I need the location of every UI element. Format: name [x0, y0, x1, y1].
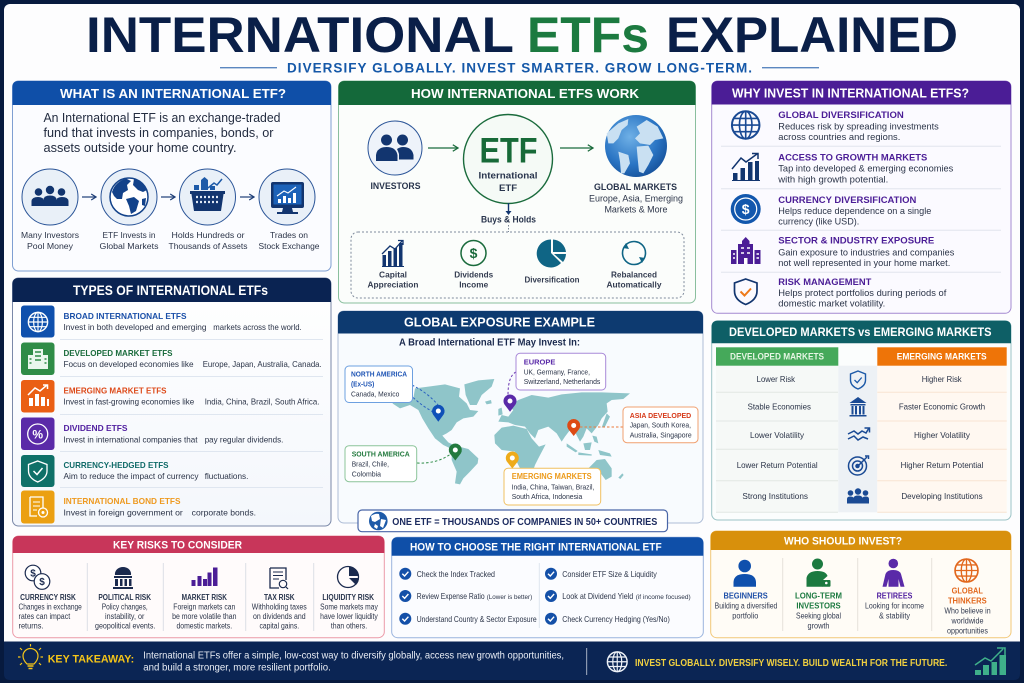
- risk: liquidity: LIQUIDITY RISK: [322, 593, 374, 602]
- arrow: buys and holds: Buys & Holds: [481, 214, 536, 224]
- icon: basket: [180, 169, 236, 225]
- type: currency hedged: Aim to reduce the impact of currency: [64, 471, 199, 481]
- checklist text: (Lower is better): [487, 594, 532, 601]
- step labels: Many Investors: [21, 230, 79, 240]
- title: EXPLAINED: [666, 7, 958, 63]
- outcomes dashed box: [351, 232, 684, 298]
- icon: growth chart: [975, 648, 1006, 675]
- type: broad: markets across the world.: [213, 322, 302, 332]
- risk: market: domestic markets.: [176, 622, 232, 631]
- benefit: growth markets: ACCESS TO GROWTH MARKETS: [778, 152, 927, 162]
- emerging list: Higher Volatility: [914, 430, 971, 440]
- benefit: growth markets: Tap into developed & emerging economies: [778, 164, 954, 174]
- icon: target: [848, 456, 868, 475]
- icon: investors: [368, 121, 422, 191]
- type: broad: [21, 306, 302, 338]
- step labels: Thousands of Assets: [168, 241, 248, 251]
- heading: how to choose: HOW TO CHOOSE THE RIGHT INTERNATIONAL ETF: [410, 542, 662, 554]
- benefit: growth markets: with high growth potential.: [777, 174, 888, 184]
- type: currency hedged: CURRENCY-HEDGED ETFS: [64, 460, 169, 470]
- benefit: sector: [731, 236, 955, 268]
- panel: how to choose: [392, 537, 703, 638]
- benefit: global diversification: across countries and regions.: [778, 132, 900, 142]
- audience: retirees: Looking for income: [865, 602, 924, 611]
- audience: long-term: LONG-TERM: [795, 592, 842, 601]
- checklist text: Check Currency Hedging (Yes/No): [562, 614, 670, 624]
- developed list: Lower Risk: [757, 374, 796, 384]
- audience: retirees: [865, 559, 924, 620]
- step labels: Trades on: [270, 230, 308, 240]
- type: dividend: %: [32, 428, 43, 442]
- callout: asia developed: [623, 407, 698, 443]
- world map: [392, 379, 630, 484]
- risk: market: be more volatile than: [172, 612, 236, 621]
- ETF circle: International: [478, 170, 538, 182]
- benefit: sector: not well represented in your home market.: [778, 258, 950, 268]
- benefit: currency: $: [742, 201, 750, 217]
- risk: currency: $: [30, 568, 36, 580]
- benefit: risk management: [734, 277, 947, 309]
- benefit: global diversification: GLOBAL DIVERSIFICATION: [778, 110, 904, 120]
- audience: global thinkers: THINKERS: [948, 597, 987, 606]
- callout: asia developed: Japan, South Korea,: [630, 421, 691, 430]
- developed list: Stable Economies: [748, 401, 811, 411]
- step labels: Pool Money: [27, 241, 74, 251]
- callout: north america: (Ex-US): [351, 380, 375, 389]
- risk: market: [172, 568, 236, 631]
- risk: currency: $: [39, 577, 45, 588]
- callout: north america: Canada, Mexico: [351, 389, 399, 398]
- risk: market: MARKET RISK: [182, 593, 227, 602]
- arrow: [560, 147, 593, 149]
- benefit: global diversification: [732, 110, 939, 142]
- step labels: Stock Exchange: [258, 241, 320, 251]
- audience: long-term: INVESTORS: [796, 602, 841, 611]
- emerging list: [899, 374, 985, 501]
- risk: liquidity: [320, 566, 378, 631]
- callout: europe: UK, Germany, France,: [524, 367, 590, 376]
- panel: why invest: [712, 81, 1011, 313]
- checklist text: [417, 569, 691, 624]
- global markets label: Markets & More: [604, 204, 668, 214]
- type: dividend: [21, 418, 283, 450]
- step labels: Holds Hundreds or: [172, 230, 245, 240]
- audience: long-term: [795, 558, 842, 631]
- callout: emerging markets: South Africa, Indonesia: [512, 492, 583, 501]
- risk: currency: rates can impact: [18, 612, 71, 621]
- definition text: An International ETF is an exchange-traded: [44, 110, 280, 125]
- column heading: developed: DEVELOPED MARKETS: [730, 352, 824, 362]
- heading: global exposure: GLOBAL EXPOSURE EXAMPLE: [404, 314, 595, 330]
- arrow: [240, 196, 254, 198]
- type: emerging: Invest in fast-growing economies like: [64, 397, 194, 407]
- definition text: assets outside your home country.: [44, 140, 236, 155]
- callout: north america: NORTH AMERICA: [351, 370, 408, 379]
- outcome: dividends income: $: [470, 245, 478, 261]
- checklist text: Look at Dividend Yield: [562, 591, 634, 601]
- banner: one ETF: [358, 510, 668, 532]
- type: developed: Focus on developed economies like: [64, 359, 194, 369]
- benefit: currency: Helps reduce dependence on a single: [778, 206, 931, 216]
- map subtitle: A Broad International ETF May Invest In:: [399, 338, 580, 349]
- outcome: capital appreciation: Appreciation: [368, 280, 418, 290]
- heading: key risks: KEY RISKS TO CONSIDER: [113, 540, 242, 552]
- benefit: sector: Gain exposure to industries and companies: [778, 247, 955, 257]
- heading: who: WHO SHOULD INVEST?: [784, 536, 902, 548]
- ETF circle: ETF: [480, 132, 538, 170]
- type: dividend: Invest in international companies that: [64, 435, 198, 445]
- audience: long-term: Seeking global: [796, 612, 841, 621]
- type: developed: [21, 342, 322, 375]
- risk: currency: CURRENCY RISK: [20, 593, 76, 602]
- type: dividend: pay regular dividends.: [205, 435, 283, 445]
- risk: political: [95, 564, 155, 631]
- panel: types of international ETFs: [12, 278, 331, 526]
- checklist text: Consider ETF Size & Liquidity: [562, 569, 658, 579]
- heading: developed vs emerging: DEVELOPED MARKETS vs EMERGING MARKETS: [729, 325, 992, 339]
- check marks: [399, 568, 557, 625]
- checklist text: Check the Index Tracked: [417, 569, 495, 579]
- developed list: Lower Return Potential: [737, 460, 818, 470]
- risk: political: instability, or: [105, 612, 145, 621]
- risk: tax: capital gains.: [259, 622, 299, 631]
- risk: political: POLITICAL RISK: [98, 593, 151, 602]
- icon: bank: [850, 397, 866, 416]
- risk: market: Foreign markets can: [173, 602, 235, 611]
- icon: monitor: [259, 169, 315, 225]
- footer: key takeaway band: [4, 642, 1020, 680]
- outcome: dividends income: [454, 240, 493, 290]
- panel: key risks: [13, 536, 384, 638]
- arrow: [428, 147, 458, 149]
- definition text: fund that invests in companies, bonds, or: [44, 125, 274, 140]
- benefit: risk management: domestic market volatility.: [778, 299, 885, 309]
- audience: beginners: BEGINNERS: [723, 592, 768, 601]
- risk: political: Policy changes,: [102, 602, 148, 611]
- global markets label: [589, 182, 683, 214]
- audience: beginners: portfolio: [732, 611, 759, 620]
- icon: blue globe: [605, 115, 667, 177]
- pin: north america: [432, 405, 445, 422]
- pin: emerging: [506, 452, 519, 468]
- emerging list: Faster Economic Growth: [899, 401, 985, 411]
- type: bond: INTERNATIONAL BOND ETFS: [64, 496, 181, 506]
- type: currency hedged: [21, 455, 248, 487]
- global markets label: GLOBAL MARKETS: [594, 182, 677, 192]
- callout: emerging markets: [504, 468, 601, 505]
- risk: political: geopolitical events.: [95, 622, 155, 631]
- icon: investors: INVESTORS: [370, 181, 421, 191]
- type: emerging: [21, 380, 319, 412]
- icon: investors pool: [22, 169, 78, 225]
- emerging list: Higher Return Potential: [901, 460, 983, 470]
- heading: types: TYPES OF INTERNATIONAL ETFs: [73, 283, 268, 298]
- risk: tax: on dividends and: [253, 612, 306, 621]
- callout: asia developed: Australia, Singapore: [630, 430, 692, 439]
- connectors: [407, 372, 623, 463]
- outcome: rebalanced: [606, 242, 662, 290]
- risk: liquidity: Some markets may: [320, 602, 378, 611]
- type: bond: Invest in foreign government or: [64, 508, 183, 518]
- type: developed: Europe, Japan, Australia, Canada.: [203, 359, 322, 369]
- icon: volatility: [848, 428, 870, 440]
- outcome: rebalanced: Automatically: [606, 280, 662, 290]
- step labels: Global Markets: [100, 241, 158, 251]
- type: emerging: India, China, Brazil, South Africa.: [205, 397, 319, 407]
- icon: shield: [850, 371, 866, 389]
- callout: emerging markets: EMERGING MARKETS: [512, 472, 592, 481]
- audience: global thinkers: [944, 559, 991, 635]
- audience: global thinkers: GLOBAL: [952, 587, 983, 596]
- outcome: dividends income: Dividends: [454, 270, 493, 280]
- callout: europe: [516, 353, 606, 390]
- arrow: buys and holds: [481, 203, 536, 232]
- risk: tax: [252, 568, 307, 631]
- takeaway text: and build a stronger, more resilient portfolio.: [143, 663, 331, 674]
- audience: retirees: & stability: [879, 611, 910, 620]
- callout: south america: Brazil, Chile,: [352, 460, 389, 469]
- icon: light bulb: [18, 644, 43, 668]
- icon: footer globe: [607, 652, 627, 672]
- global markets label: Europe, Asia, Emerging: [589, 194, 683, 204]
- developed list: Lower Volatility: [750, 430, 805, 440]
- title: ETFs: [527, 7, 649, 63]
- panel: what is an international ETF: [12, 81, 331, 271]
- benefit: risk management: RISK MANAGEMENT: [778, 277, 872, 287]
- definition text: [44, 110, 280, 155]
- outcome: capital appreciation: Capital: [379, 270, 407, 280]
- type: developed: DEVELOPED MARKET ETFS: [64, 348, 173, 358]
- panel: global exposure example: [338, 311, 703, 532]
- slogan: INVEST GLOBALLY. DIVERSIFY WISELY. BUILD WEALTH FOR THE FUTURE.: [635, 658, 948, 669]
- audience: retirees: RETIREES: [877, 592, 913, 601]
- checklist text: (if income focused): [636, 594, 691, 601]
- outcome: diversification: Diversification: [524, 274, 580, 284]
- audience: beginners: [715, 560, 777, 620]
- callout: south america: SOUTH AMERICA: [352, 449, 410, 458]
- outcome: diversification: [524, 239, 580, 284]
- benefit: currency: CURRENCY DIVERSIFICATION: [778, 195, 917, 205]
- type: broad: Invest in both developed and emerging: [64, 322, 207, 332]
- benefit: growth markets: [732, 152, 954, 184]
- risk: liquidity: than others.: [331, 622, 367, 631]
- step labels: ETF Invests in: [102, 230, 156, 240]
- risk: tax: TAX RISK: [264, 593, 295, 602]
- takeaway text: International ETFs offer a simple, low-cost way to diversify globally, access new growth opportunities,: [143, 650, 564, 661]
- benefit: risk management: Helps protect portfolios during periods of: [778, 288, 947, 298]
- type: bond: [21, 490, 256, 524]
- emerging list: Developing Institutions: [901, 491, 983, 501]
- pin: europe: [503, 395, 516, 412]
- type: emerging: EMERGING MARKET ETFS: [64, 386, 167, 396]
- pin: south america: [449, 444, 462, 460]
- outcome: capital appreciation: [368, 240, 418, 290]
- callout: asia developed: ASIA DEVELOPED: [630, 411, 692, 420]
- type: broad: BROAD INTERNATIONAL ETFS: [64, 311, 187, 321]
- audience: global thinkers: Who believe in: [944, 607, 991, 616]
- pin: asia: [567, 419, 580, 436]
- column heading: emerging: EMERGING MARKETS: [897, 352, 987, 362]
- subtitle: DIVERSIFY GLOBALLY. INVEST SMARTER. GROW LONG-TERM.: [287, 60, 752, 76]
- audience: global thinkers: opportunities: [947, 626, 988, 635]
- banner: one ETF: ONE ETF = THOUSANDS OF COMPANIES IN 50+ COUNTRIES: [392, 517, 658, 528]
- audience: beginners: Building a diversified: [715, 602, 777, 611]
- risk: currency: [18, 565, 82, 631]
- ETF circle: [464, 114, 552, 204]
- benefit: global diversification: Reduces risk by spreading investments: [778, 121, 939, 131]
- outcome: dividends income: Income: [459, 280, 488, 290]
- arrow: [161, 196, 175, 198]
- type: currency hedged: fluctuations.: [205, 471, 248, 481]
- callout: europe: Switzerland, Netherlands: [524, 377, 601, 386]
- callout: south america: Colombia: [352, 469, 382, 478]
- label: key takeaway: KEY TAKEAWAY:: [48, 654, 134, 666]
- checklist text: Understand Country & Sector Exposure: [417, 614, 537, 624]
- callout: north america: [345, 366, 412, 402]
- callout: emerging markets: India, China, Taiwan, Brazil,: [512, 482, 594, 491]
- title: [86, 7, 958, 63]
- callout: south america: [345, 446, 417, 482]
- developed list: Strong Institutions: [742, 491, 808, 501]
- arrow: [82, 196, 96, 198]
- heading: how: HOW INTERNATIONAL ETFS WORK: [411, 86, 640, 101]
- risk: tax: Withholding taxes: [252, 602, 307, 611]
- audience: long-term: growth: [808, 622, 830, 631]
- risk: currency: returns.: [18, 622, 44, 631]
- table backgrounds: [716, 347, 1007, 512]
- checklist text: Review Expense Ratio: [417, 591, 485, 601]
- emerging list: Higher Risk: [922, 374, 962, 384]
- ETF circle: ETF: [499, 183, 517, 194]
- panel: developed vs emerging: [712, 321, 1011, 520]
- audience: global thinkers: worldwide: [951, 617, 984, 626]
- type: bond: corporate bonds.: [192, 508, 256, 518]
- benefit: currency: [731, 194, 931, 227]
- panel: who should invest: [711, 531, 1011, 638]
- heading: why: WHY INVEST IN INTERNATIONAL ETFS?: [732, 86, 969, 100]
- heading: what is: WHAT IS AN INTERNATIONAL ETF?: [60, 86, 286, 101]
- icon: team: [847, 488, 869, 504]
- outcome: rebalanced: Rebalanced: [611, 270, 657, 280]
- risk: liquidity: have lower liquidity: [320, 612, 378, 621]
- callout: europe: EUROPE: [524, 357, 555, 366]
- benefit: currency: currency (like USD).: [778, 217, 859, 227]
- icon: globe: [101, 169, 157, 225]
- benefit: sector: SECTOR & INDUSTRY EXPOSURE: [778, 236, 934, 246]
- step labels: [21, 230, 320, 251]
- risk: currency: Changes in exchange: [18, 602, 82, 611]
- panel: how international ETFs work: [338, 81, 696, 303]
- title: INTERNATIONAL: [86, 7, 514, 63]
- takeaway text: [143, 650, 564, 674]
- developed list: [737, 374, 818, 501]
- type: dividend: DIVIDEND ETFS: [64, 423, 128, 433]
